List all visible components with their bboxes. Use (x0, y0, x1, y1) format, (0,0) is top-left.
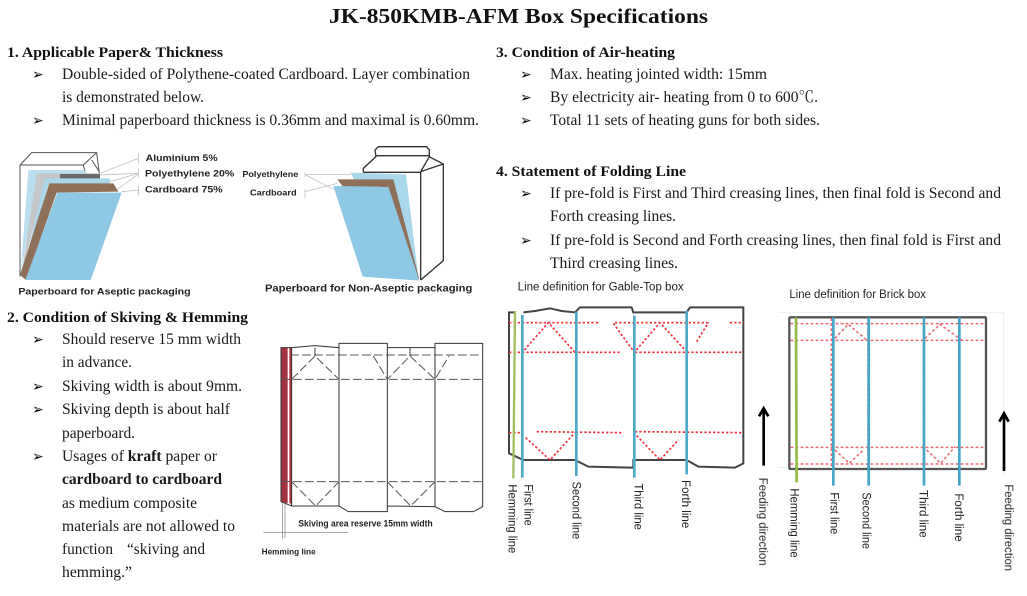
bullet list 2: Skiving depth is about half (62, 401, 231, 418)
vertical labels: Hemming line (788, 488, 802, 558)
vertical labels: First line (827, 492, 841, 535)
bullet list 2: Usages of kraft paper or (62, 448, 217, 465)
aseptic carton with layers (20, 153, 122, 280)
vertical labels: First line (522, 484, 536, 526)
box outline (789, 317, 986, 469)
bullet list 2: as medium composite (62, 495, 197, 512)
label: hemming line: Hemming line (262, 546, 316, 556)
bullet list 4: Forth creasing lines. (550, 208, 676, 225)
bullet list 3: ➢ (520, 113, 532, 129)
feeding arrow (999, 413, 1009, 471)
bullet list 4: If pre-fold is Second and Forth creasing lines, then final fold is First and (550, 232, 1001, 249)
bullet list 2: ➢ (32, 449, 44, 465)
first to forth lines (833, 317, 959, 486)
leader lines non-aseptic (305, 173, 351, 198)
vertical labels: Feeding direction (756, 478, 770, 566)
vertical labels: Feeding direction (1002, 484, 1016, 571)
section 3: condition of air-heating (496, 45, 820, 129)
box outline (509, 307, 743, 468)
label: polyethylene 20%: Polyethylene 20% (145, 169, 235, 179)
red crease lines (509, 323, 743, 460)
bullet list 4: Third creasing lines. (550, 255, 678, 272)
figure: paperboard layers (18, 147, 472, 297)
bullet list 4: ➢ (520, 233, 532, 249)
faint frame (778, 312, 1003, 475)
bullet list 2: cardboard to cardboard (62, 471, 222, 488)
vertical labels: Third line (917, 490, 931, 538)
section 1: applicable paper and thickness (7, 45, 479, 129)
leader lines aseptic (100, 153, 138, 195)
bullet list 3: ➢ (520, 90, 532, 106)
figure: brick line definition (778, 287, 1016, 571)
dashed crease lines (281, 355, 483, 506)
red crease lines (791, 318, 985, 468)
gable-top title: Line definition for Gable-Top box (518, 280, 684, 294)
heading 2: 2. Condition of Skiving & Hemming (7, 310, 249, 326)
vertical labels: Second line (569, 482, 583, 540)
section 4: statement of folding line (496, 164, 1001, 272)
label: aluminium: Aluminium 5% (146, 153, 218, 163)
label: cardboard 75%: Cardboard 75% (145, 184, 223, 194)
vertical labels: Third line (632, 483, 646, 530)
bullet list 2: materials are not allowed to (62, 518, 235, 535)
vertical labels (788, 484, 1016, 571)
caption: non-aseptic: Paperboard for Non-Aseptic packaging (265, 283, 472, 294)
bullet list 1: ➢ (32, 113, 44, 129)
heading 1: 1. Applicable Paper& Thickness (7, 45, 223, 61)
vertical labels: Hemming line (506, 484, 520, 554)
skiving strip (281, 348, 288, 503)
bullet list 2: “skiving and (127, 541, 205, 558)
bullet list 4: If pre-fold is First and Third creasing lines, then final fold is Second and (550, 185, 1001, 202)
bullet list 3: By electricity air- heating from 0 to 600℃. (550, 89, 818, 106)
bullet list 1: ➢ (32, 67, 44, 83)
non-aseptic carton with layers (333, 147, 443, 281)
bullet list 3 (520, 66, 820, 129)
bullet list 2: hemming.” (62, 564, 132, 581)
hemming line (792, 317, 801, 482)
brick title: Line definition for Brick box (789, 287, 926, 301)
label: cardboard: Cardboard (250, 188, 297, 198)
bullet list 2: ➢ (32, 332, 44, 348)
section 2: skiving and hemming (7, 310, 249, 581)
bullet list 1 (32, 66, 479, 129)
label: polyethylene: Polyethylene (242, 169, 299, 179)
bullet list 2: ➢ (32, 402, 44, 418)
bullet list 3: Total 11 sets of heating guns for both sides. (550, 112, 820, 129)
caption: aseptic: Paperboard for Aseptic packaging (18, 287, 191, 297)
box outline (281, 343, 483, 512)
bullet list 2: Should reserve 15 mm width (62, 331, 241, 348)
bullet list 3: Max. heating jointed width: 15mm (550, 66, 767, 83)
bullet list 1: Minimal paperboard thickness is 0.36mm and maximal is 0.60mm. (62, 112, 479, 129)
hemming strip (289, 348, 292, 505)
first to forth lines (522, 311, 687, 478)
bullet list 1: Double-sided of Polythene-coated Cardboard. Layer combination (62, 66, 470, 83)
bullet list 2: ➢ (32, 379, 44, 395)
vertical labels: Forth line (679, 480, 693, 529)
vertical labels (506, 478, 770, 566)
bullet list 2 (32, 331, 242, 581)
bullet list 4: ➢ (520, 186, 532, 202)
feeding arrow (759, 408, 768, 466)
vertical labels: Second line (860, 492, 874, 549)
heading 3: 3. Condition of Air-heating (496, 45, 676, 61)
bullet list 2: paperboard. (62, 425, 135, 442)
bullet list 4 (520, 185, 1001, 272)
vertical labels: Forth line (952, 493, 966, 542)
heading 4: 4. Statement of Folding Line (496, 164, 686, 180)
hemming line marker (263, 503, 348, 538)
figure: gable-top line definition (506, 280, 770, 566)
bullet list 1: is demonstrated below. (62, 89, 204, 106)
hemming line (513, 311, 515, 478)
bullet list 2: Skiving width is about 9mm. (62, 378, 242, 395)
figure: skiving diagram (262, 343, 483, 556)
bullet list 2: in advance. (62, 354, 132, 371)
bullet list 3: ➢ (520, 67, 532, 83)
bullet list 2: function (62, 541, 113, 558)
label: skiving area: Skiving area reserve 15mm width (298, 518, 433, 528)
title: JK-850KMB-AFM Box Specifications (329, 4, 708, 28)
